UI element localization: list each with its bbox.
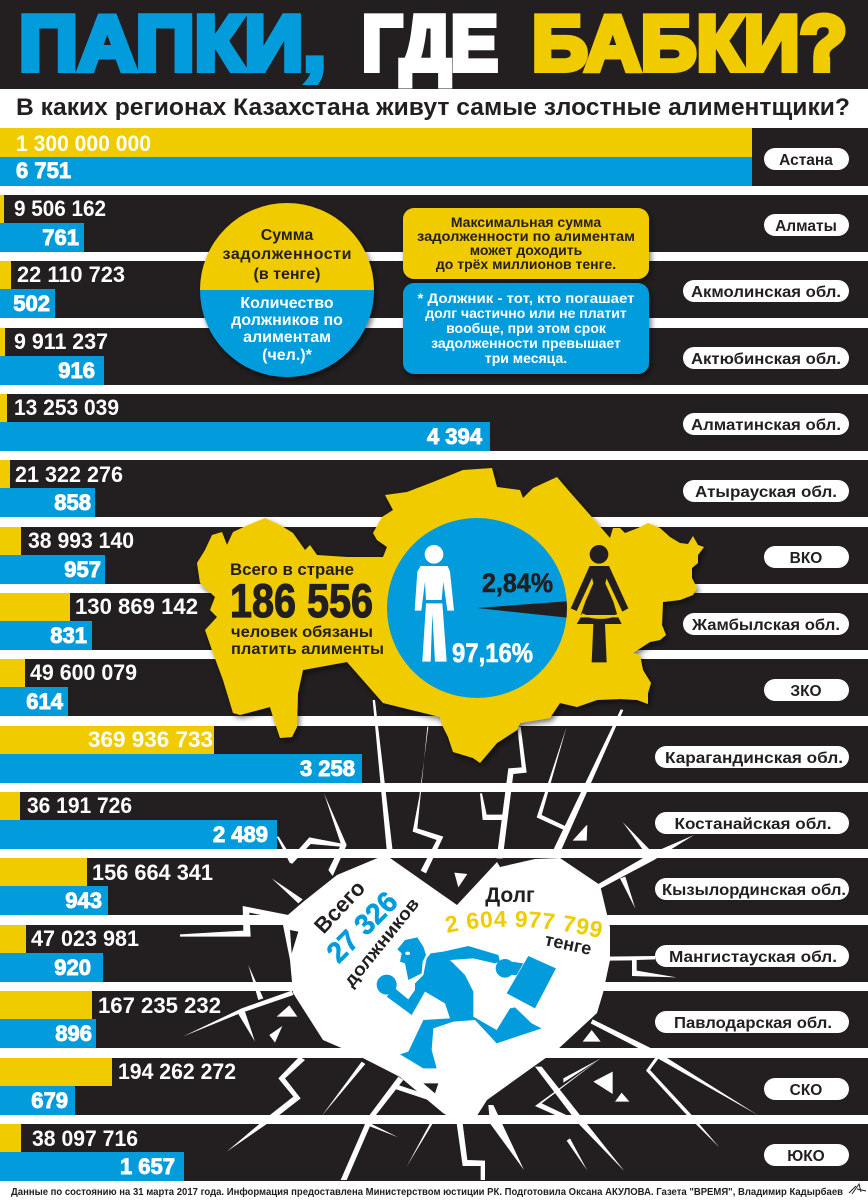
total debtors xyxy=(309,875,423,990)
blue debtor bars xyxy=(0,157,752,1181)
legend: debt sum: задолженности xyxy=(222,246,352,263)
callout: maximum debt: может доходить xyxy=(470,242,583,258)
region labels: ЗКО xyxy=(790,683,822,700)
country total text: 186 556 xyxy=(230,574,373,627)
title word: ПАПКИ: ПАПКИ, xyxy=(19,0,326,87)
debtor counts: 3 258 xyxy=(300,756,355,781)
debtor counts: 6 751 xyxy=(16,158,71,183)
callout: debtor definition: вообще, при этом срок xyxy=(446,320,607,336)
callout: debtor definition: * Должник - тот, кто погашает xyxy=(418,290,635,306)
debt values: 1 300 000 000 xyxy=(16,131,151,156)
callout: maximum debt: Максимальная сумма xyxy=(451,214,601,230)
country total text: Всего в стране xyxy=(230,561,354,579)
total debtors: должников xyxy=(340,894,423,990)
debtor counts: 916 xyxy=(58,358,95,383)
country total text: человек обязаны xyxy=(231,624,373,641)
map of Kazakhstan xyxy=(197,468,704,763)
region labels: Павлодарская обл. xyxy=(674,1015,832,1032)
legend: debtors count: (чел.)* xyxy=(262,347,313,364)
region labels: Жамбылская обл. xyxy=(691,617,840,634)
debtor counts: 957 xyxy=(64,557,101,582)
icon: running man with briefcase xyxy=(377,937,556,1068)
debt values: 9 506 162 xyxy=(14,196,106,221)
region labels: Костанайская обл. xyxy=(674,816,832,833)
heart notch triangles xyxy=(290,930,298,953)
debt values xyxy=(14,131,236,1151)
debt values: 167 235 232 xyxy=(98,993,221,1018)
title word: ГДЕ: ГДЕ xyxy=(362,0,498,87)
callout: debtor definition xyxy=(403,283,649,374)
debt values: 38 993 140 xyxy=(28,528,134,553)
country total text xyxy=(230,561,384,658)
right side cracks xyxy=(563,822,758,1171)
shattered glass cracks xyxy=(180,700,624,1180)
debtor counts: 896 xyxy=(55,1021,92,1046)
legend: debtors count: Количество xyxy=(240,295,334,312)
debt values: 194 262 272 xyxy=(118,1059,236,1084)
region labels: ЮКО xyxy=(787,1148,825,1165)
debt values: 130 869 142 xyxy=(75,594,198,619)
debt values: 369 936 733 xyxy=(88,727,213,752)
debt values: 38 097 716 xyxy=(32,1126,138,1151)
region labels: Акмолинская обл. xyxy=(691,284,841,301)
debtor counts: 1 657 xyxy=(120,1154,175,1179)
debtor counts: 502 xyxy=(13,291,50,316)
heart lower triangle xyxy=(423,1083,438,1093)
debtor counts: 2 489 xyxy=(213,822,268,847)
region labels: ВКО xyxy=(790,550,822,567)
women percentage: 2,84% xyxy=(482,568,553,598)
legend: debt sum: Сумма xyxy=(261,227,313,244)
yellow debt bars xyxy=(0,128,752,1152)
legend: debtors count: алиментам xyxy=(243,329,331,346)
region labels: Астана xyxy=(779,152,833,169)
title banner xyxy=(0,0,868,89)
debt values: 156 664 341 xyxy=(92,860,213,885)
region labels: Кызылординская обл. xyxy=(662,882,846,899)
icon: man xyxy=(415,545,454,662)
callout: debtor definition: три месяца. xyxy=(485,350,567,366)
map shape xyxy=(197,468,704,763)
title word: БАБКИ: БАБКИ? xyxy=(532,0,847,87)
debt values: 36 191 726 xyxy=(27,793,132,818)
legend: debt sum: (в тенге) xyxy=(254,266,320,283)
icon: artist signature xyxy=(849,1184,866,1194)
debtor counts: 614 xyxy=(26,689,64,714)
region labels: Мангистауская обл. xyxy=(669,949,837,966)
debt values: 9 911 237 xyxy=(14,329,108,354)
legend: debtors count xyxy=(231,295,343,364)
debtor counts: 858 xyxy=(54,490,91,515)
region labels: Атырауская обл. xyxy=(695,484,837,501)
region labels: Актюбинская обл. xyxy=(691,351,841,368)
country total text: платить алименты xyxy=(231,641,384,658)
subtitle: В каких регионах Казахстана живут самые злостные алиментщики? xyxy=(16,94,850,121)
total debt xyxy=(446,884,602,959)
legend: debt sum xyxy=(222,227,352,283)
callout: debtor definition: долг частично или не платит xyxy=(425,305,627,321)
callout: maximum debt: задолженности по алиментам xyxy=(417,228,635,244)
debtor counts: 920 xyxy=(54,955,91,980)
debtor counts: 831 xyxy=(50,623,87,648)
debtor counts: 761 xyxy=(42,225,79,250)
region labels: Карагандинская обл. xyxy=(665,750,843,767)
legend: debtors count: должников по xyxy=(231,312,343,329)
region labels: СКО xyxy=(790,1082,822,1099)
callout: debtor definition: задолженности превышает xyxy=(431,335,621,351)
debtor counts: 679 xyxy=(31,1088,68,1113)
total debt: тенге xyxy=(543,929,593,959)
debtor counts: 4 394 xyxy=(427,424,483,449)
callout: maximum debt xyxy=(403,208,649,279)
debt values: 21 322 276 xyxy=(15,462,123,487)
region labels xyxy=(655,148,849,1166)
pie chart: men vs women xyxy=(387,518,570,698)
callout: maximum debt: до трёх миллионов тенге. xyxy=(436,256,616,272)
debt values: 49 600 079 xyxy=(30,660,137,685)
region labels: Алматы xyxy=(775,218,837,235)
total debt: 2 604 977 799 xyxy=(446,911,602,938)
men percentage: 97,16% xyxy=(452,638,533,668)
total debtors: 27 326 xyxy=(321,886,404,969)
region labels: Алматинская обл. xyxy=(691,417,841,434)
total debt: Долг xyxy=(485,884,535,907)
debtor counts xyxy=(13,158,483,1179)
total debtors: Всего xyxy=(309,875,370,938)
heart shape xyxy=(283,858,610,1115)
debt values: 47 023 981 xyxy=(31,926,139,951)
women share wedge xyxy=(477,601,570,618)
debtor counts: 943 xyxy=(65,888,102,913)
debt values: 22 110 723 xyxy=(17,262,125,287)
icon: woman xyxy=(571,545,628,662)
debt values: 13 253 039 xyxy=(14,395,119,420)
legend circle xyxy=(200,203,374,377)
